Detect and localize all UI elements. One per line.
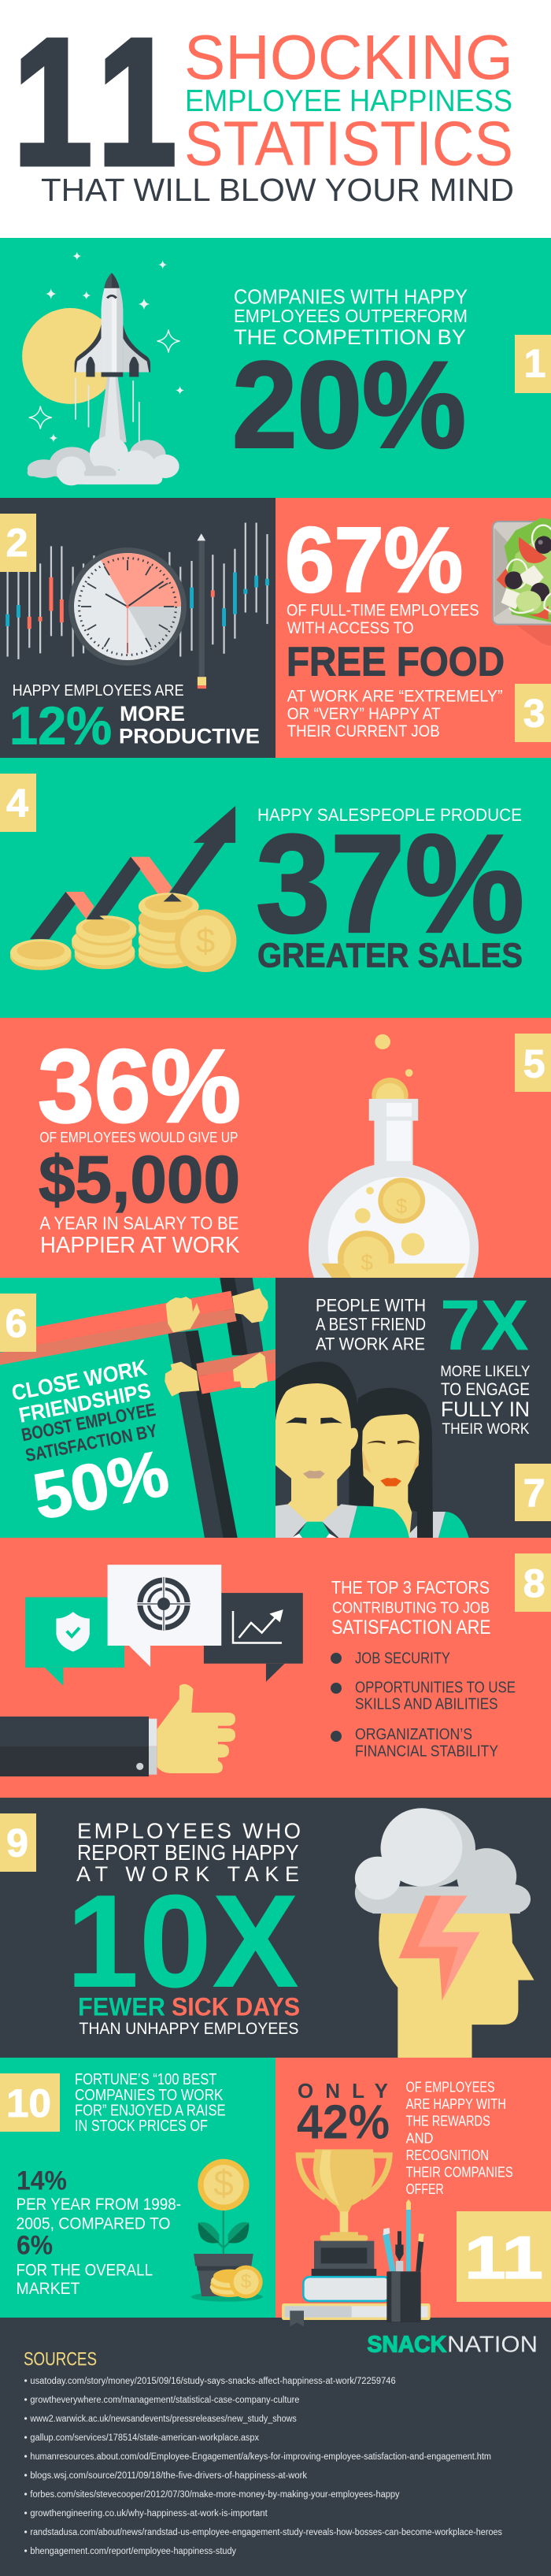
badge 10 — [0, 2073, 60, 2132]
illustration: salad plate — [493, 518, 551, 646]
panel: header — [0, 0, 551, 238]
panel: stat 11 — [276, 2058, 551, 2318]
illustration: flask with coins: $ — [361, 1250, 373, 1275]
list: financial stability: FINANCIAL STABILITY — [355, 1743, 498, 1761]
heading: top 3 factors: CONTRIBUTING TO JOB — [332, 1599, 490, 1616]
number: $5,000: $5,000 — [39, 1142, 240, 1216]
icon: target — [137, 1577, 190, 1631]
text: close work friendships: FRIENDSHIPS — [17, 1379, 153, 1427]
text: at work are happy — [287, 688, 503, 741]
text: only: ONLY — [298, 2079, 388, 2103]
title: statistics: STATISTICS — [184, 109, 513, 178]
text: more likely to engage — [440, 1364, 531, 1438]
number: 42%: 42% — [297, 2095, 390, 2149]
text: boost employee satisfaction — [21, 1403, 156, 1461]
panel: stat 6 — [0, 1278, 276, 1538]
text: overall market — [16, 2261, 153, 2298]
illustration: flask with coins — [309, 1034, 479, 1278]
badge 4: 4 — [6, 781, 28, 826]
panel: stat 10 — [0, 2058, 276, 2318]
list: sources: growthengineering.co.uk/why-happiness-at-work-is-important — [30, 2509, 268, 2518]
number: 67%: 67% — [285, 508, 463, 611]
list: financial stability — [331, 1726, 498, 1761]
text: of full-time employees: WITH ACCESS TO — [287, 619, 414, 637]
title number — [13, 2, 176, 202]
list: opportunities — [331, 1679, 516, 1713]
icon: coin stacks — [10, 893, 236, 972]
badge 6: 6 — [6, 1301, 27, 1346]
text: at work are happy: THEIR CURRENT JOB — [287, 722, 440, 741]
text: fortune 100: FOR” ENJOYED A RAISE — [75, 2102, 226, 2119]
panel: stat 4 — [0, 758, 551, 1018]
text block: intro — [234, 285, 468, 349]
text: people with a best friend — [316, 1299, 425, 1350]
badge 9: 9 — [6, 1821, 28, 1865]
text: people with a best friend: PEOPLE WITH — [316, 1296, 426, 1316]
text: more likely to engage: THEIR WORK — [442, 1421, 530, 1438]
illustration: head with storm cloud — [355, 1808, 534, 2060]
badge 3 — [515, 684, 551, 742]
text: a year in salary: HAPPIER AT WORK — [40, 1233, 240, 1258]
number: 7X: 7X — [440, 1286, 529, 1366]
badge 10: 10 — [6, 2081, 51, 2125]
logo: snacknation: NATION — [447, 2332, 538, 2357]
text: more productive: MORE — [120, 702, 185, 726]
badge 8: 8 — [523, 1561, 545, 1605]
text: boost employee satisfaction: SATISFACTION BY — [24, 1420, 159, 1465]
illustration: money plant — [191, 2159, 263, 2302]
icons: plant dollar signs: $ — [213, 2162, 234, 2203]
text: more likely to engage: FULLY IN — [441, 1397, 530, 1421]
number: 36%: 36% — [38, 1028, 241, 1144]
text block: intro: COMPANIES WITH HAPPY — [234, 285, 468, 309]
text: a year in salary — [39, 1213, 240, 1258]
text: employees who report — [76, 1818, 301, 1886]
logo: snacknation — [367, 2332, 538, 2357]
text: of full-time employees: OF FULL-TIME EMPLOYEES — [287, 602, 479, 620]
text: of employees would give up: OF EMPLOYEES WOULD GIVE UP — [39, 1130, 238, 1145]
number: 6%: 6% — [17, 2231, 53, 2261]
text: happy salespeople produce: HAPPY SALESPEOPLE PRODUCE — [257, 805, 522, 825]
illustration: linked arms — [0, 1278, 276, 1538]
text: per year: 2005, COMPARED TO — [16, 2214, 170, 2233]
illustration: two colleagues — [276, 1361, 469, 1539]
badge 2: 2 — [6, 521, 28, 565]
panel: stat 7 — [276, 1278, 551, 1539]
text: overall market: MARKET — [16, 2279, 80, 2298]
panel: stat 8 — [0, 1538, 551, 1798]
badge 4 — [0, 774, 36, 832]
heading: top 3 factors: SATISFACTION ARE — [331, 1616, 491, 1639]
title number: 1 — [98, 2, 176, 202]
text: close work friendships: CLOSE WORK — [9, 1355, 149, 1405]
text: fewer sick days: SICK DAYS — [172, 1993, 300, 2021]
badge 6 — [0, 1294, 36, 1352]
big number: 20%: 20% — [232, 337, 466, 474]
icon: clock — [68, 547, 187, 666]
badge 1 — [515, 335, 551, 393]
number: 10X: 10X — [66, 1867, 299, 2015]
text: at work are happy: OR “VERY” HAPPY AT — [287, 705, 441, 723]
list: sources: growtheverywhere.com/management/statistical-case-company-culture — [30, 2396, 299, 2405]
icon: pencil — [197, 533, 206, 689]
heading: greater sales: GREATER SALES — [257, 936, 523, 974]
badge 3: 3 — [523, 692, 545, 736]
text: people with a best friend: AT WORK ARE — [316, 1334, 425, 1354]
text: a year in salary: A YEAR IN SALARY TO BE — [39, 1213, 239, 1234]
icons: plant dollar signs — [213, 2162, 251, 2292]
list: sources: www2.warwick.ac.uk/newsandevents/pressreleases/new_study_shows — [29, 2415, 297, 2424]
illustration: flask with coins: $ — [396, 1194, 408, 1218]
text: boost employee satisfaction: BOOST EMPLOYEE — [20, 1399, 157, 1445]
text: fortune 100: FORTUNE’S “100 BEST — [75, 2071, 216, 2088]
text: fewer sick days — [78, 1993, 300, 2021]
list: sources: blogs.wsj.com/source/2011/09/18/the-five-drivers-of-happiness-at-work — [30, 2471, 307, 2481]
text: employees who report: EMPLOYEES WHO — [77, 1818, 301, 1843]
text: of employees — [406, 2078, 513, 2197]
panel: stat 3 — [276, 498, 551, 758]
illustration: thumbs up — [0, 1684, 235, 1776]
badge 9 — [0, 1813, 36, 1872]
title number: 1 — [13, 2, 92, 202]
icons: plant dollar signs: $ — [241, 2271, 251, 2292]
text: close work friendships — [13, 1360, 151, 1423]
badge 2 — [0, 514, 36, 572]
panel: footer background — [0, 2318, 551, 2576]
text: fortune 100: COMPANIES TO WORK — [75, 2087, 224, 2104]
text: employees who report: AT WORK TAKE — [76, 1862, 299, 1886]
badge 5: 5 — [523, 1042, 545, 1086]
text: happy employees are: HAPPY EMPLOYEES ARE — [13, 682, 184, 700]
number: 14%: 14% — [17, 2166, 67, 2196]
list: sources: randstadusa.com/about/news/randstad-us-employee-engagement-study-reveals-how-bosses-can-become-workplace-heroes — [30, 2528, 502, 2537]
text: fewer sick days: FEWER — [78, 1993, 165, 2021]
text: of employees: RECOGNITION — [406, 2147, 489, 2163]
illustration: rocket launch — [22, 273, 179, 485]
heading: sources: SOURCES — [24, 2349, 97, 2370]
subtitle: THAT WILL BLOW YOUR MIND — [41, 172, 514, 208]
heading: top 3 factors: THE TOP 3 FACTORS — [331, 1577, 490, 1598]
title: shocking: SHOCKING — [184, 22, 513, 92]
text: of employees: ARE HAPPY WITH — [406, 2095, 506, 2112]
heading: top 3 factors — [331, 1577, 491, 1639]
list: job security — [331, 1650, 450, 1667]
text: more likely to engage: MORE LIKELY — [440, 1364, 531, 1380]
text: of employees: THE REWARDS — [406, 2113, 490, 2129]
text: fortune 100: IN STOCK PRICES OF — [75, 2118, 208, 2135]
illustration: trophy on books with pens — [282, 2149, 431, 2326]
icon: dollar sign: $ — [196, 922, 215, 960]
text: more likely to engage: TO ENGAGE — [441, 1379, 530, 1399]
panel: stat 2 — [0, 498, 276, 758]
text: at work are happy: AT WORK ARE “EXTREMELY” — [287, 688, 503, 706]
text: per year — [16, 2195, 181, 2233]
text: of employees: OF EMPLOYEES — [406, 2078, 495, 2095]
number: 50%: 50% — [28, 1438, 174, 1534]
list: opportunities: OPPORTUNITIES TO USE — [355, 1679, 516, 1696]
logo: snacknation: SNACK — [367, 2332, 446, 2357]
text: employees who report: REPORT BEING HAPPY — [77, 1840, 299, 1865]
panel: stat 1 — [0, 238, 551, 498]
text: more productive: PRODUCTIVE — [119, 724, 260, 748]
list: sources: bhengagement.com/report/employee-happiness-study — [30, 2547, 236, 2556]
icon: growth chart — [233, 1611, 282, 1643]
illustration: speech bubbles — [25, 1565, 303, 1686]
badge 8 — [515, 1553, 551, 1612]
text: overall market: FOR THE OVERALL — [16, 2261, 153, 2280]
text block: intro: THE COMPETITION BY — [234, 325, 466, 349]
number: 12%: 12% — [9, 696, 112, 756]
list: sources: humanresources.about.com/od/Employee-Engagement/a/keys-for-improving-employee-satisfaction-and-engagement.htm — [30, 2452, 491, 2462]
badge 7 — [515, 1464, 551, 1521]
text: more productive — [119, 702, 260, 748]
text: of employees: OFFER — [406, 2181, 444, 2197]
list: financial stability: ORGANIZATION’S — [355, 1726, 472, 1743]
list: sources: gallup.com/services/178514/state-american-workplace.aspx — [30, 2433, 259, 2443]
icon: growth arrow — [30, 806, 235, 939]
text: per year: PER YEAR FROM 1998- — [16, 2195, 181, 2214]
badge 11 — [457, 2211, 551, 2302]
text: of employees: AND — [406, 2130, 433, 2146]
text: than unhappy employees: THAN UNHAPPY EMPLOYEES — [79, 2020, 298, 2038]
list: sources: usatoday.com/story/money/2015/09/16/study-says-snacks-affect-happiness-at-work/72259746 — [30, 2377, 396, 2386]
icons: stars — [29, 252, 184, 443]
heading: free food: FREE FOOD — [287, 640, 505, 685]
text: people with a best friend: A BEST FRIEND — [316, 1314, 426, 1334]
chart: candlestick bars — [6, 523, 269, 659]
panel: stat 5 — [0, 1018, 551, 1278]
panel: stat 9 — [0, 1798, 551, 2060]
list: job security: JOB SECURITY — [355, 1650, 450, 1667]
text: of employees: THEIR COMPANIES — [406, 2164, 513, 2181]
list: sources — [24, 2377, 502, 2556]
text: of full-time employees — [287, 602, 479, 637]
badge 11: 11 — [464, 2225, 543, 2292]
text: fortune 100 — [75, 2071, 226, 2135]
title: employee happiness: EMPLOYEE HAPPINESS — [185, 84, 512, 118]
list: opportunities: SKILLS AND ABILITIES — [355, 1695, 498, 1713]
list: sources: forbes.com/sites/stevecooper/2012/07/30/make-more-money-by-making-your-employees-happy — [30, 2490, 400, 2500]
number: 37%: 37% — [256, 806, 524, 962]
text block: intro: EMPLOYEES OUTPERFORM — [234, 306, 468, 326]
badge 5 — [515, 1034, 551, 1092]
badge 1: 1 — [524, 342, 545, 386]
badge 7: 7 — [523, 1472, 545, 1516]
